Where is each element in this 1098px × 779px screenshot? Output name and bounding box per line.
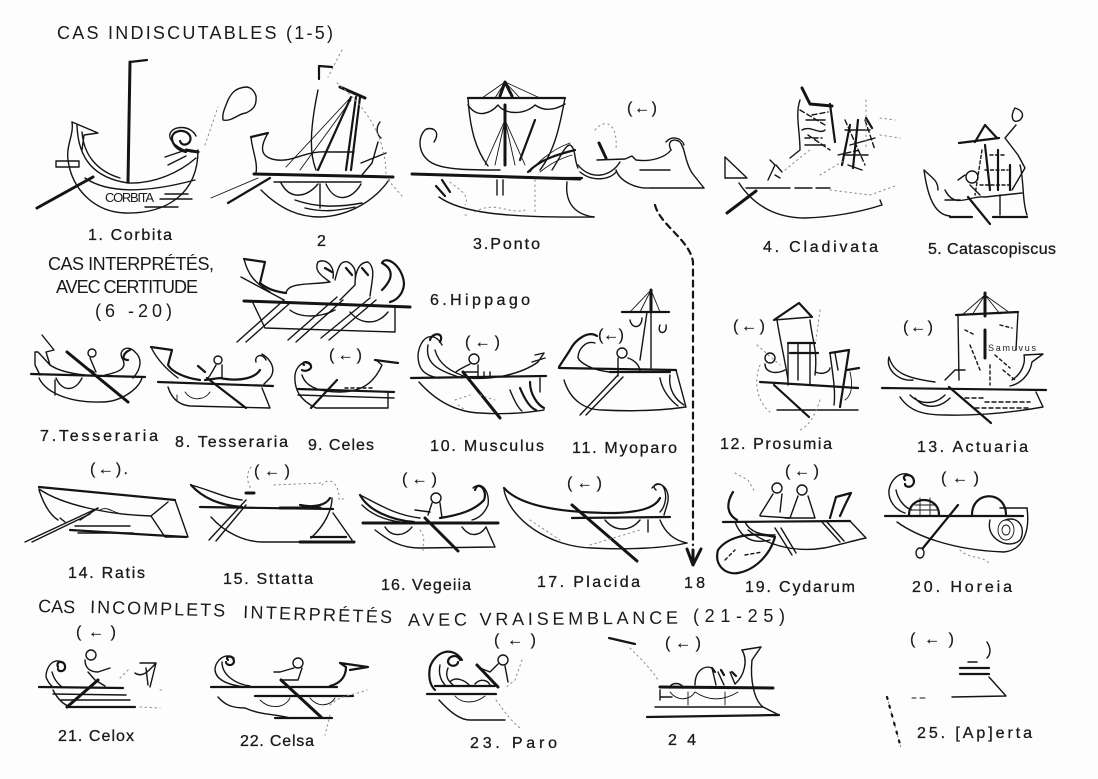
label: 20. Horeia bbox=[912, 579, 1012, 596]
arrow note: (←) bbox=[567, 475, 602, 492]
ship 1: Corbita bbox=[37, 60, 218, 244]
label: 4. Cladivata bbox=[763, 239, 878, 256]
ship 4: Cladivata bbox=[725, 88, 900, 256]
ship 7: Tesseraria bbox=[31, 335, 158, 445]
label: 11. Myoparo bbox=[572, 440, 677, 457]
label: 8. Tesseraria bbox=[175, 434, 288, 451]
arrow note: (←) bbox=[254, 463, 290, 480]
ship 21: Celox bbox=[39, 624, 165, 745]
arrow note: (←) bbox=[329, 347, 362, 364]
label: 10. Musculus bbox=[430, 438, 544, 455]
label: 15. Sttatta bbox=[223, 571, 313, 588]
label: 5. Catascopiscus bbox=[928, 241, 1056, 258]
label: 21. Celox bbox=[58, 728, 134, 745]
heading: cas incomplets: INCOMPLETS bbox=[90, 597, 225, 621]
label: 14. Ratis bbox=[68, 565, 145, 582]
ship 13: Actuaria bbox=[882, 293, 1046, 456]
arrow note: (←) bbox=[402, 471, 437, 488]
arrow note: (←) bbox=[494, 632, 536, 649]
heading: cas incomplets: INTERPRÉTÉS bbox=[243, 602, 392, 627]
heading: cas incomplets: (21-25) bbox=[693, 606, 785, 626]
arrow note: (←) bbox=[76, 624, 116, 641]
arrow note: (←) bbox=[465, 334, 500, 351]
heading: cas incomplets bbox=[38, 596, 785, 630]
heading: cas incomplets: AVEC VRAISEMBLANCE bbox=[408, 608, 678, 630]
ship 18 fragment with bow bbox=[552, 100, 704, 188]
ship 16: Vegeiia bbox=[360, 471, 498, 594]
label: 1. Corbita bbox=[88, 227, 172, 244]
ship 2 bbox=[211, 50, 402, 250]
fragment: cloud outline bbox=[223, 87, 256, 120]
arrow note: (←) bbox=[941, 470, 979, 487]
label: 2 bbox=[317, 233, 326, 250]
ship 10: Musculus bbox=[411, 334, 546, 455]
ship 23: Paro bbox=[427, 632, 557, 752]
arrow note: (←) bbox=[903, 319, 933, 336]
label: 22. Celsa bbox=[240, 733, 314, 750]
label: 9. Celes bbox=[308, 437, 374, 454]
label: 13. Actuaria bbox=[917, 439, 1028, 456]
label: 7.Tesseraria bbox=[40, 428, 158, 445]
arrow note: (←) bbox=[665, 635, 701, 652]
heading: cas interprétés: (6 -20) bbox=[95, 301, 172, 321]
ship 15: Statta bbox=[191, 463, 354, 588]
heading: cas incomplets: CAS bbox=[38, 596, 76, 617]
arrow note: (←) bbox=[785, 463, 819, 480]
ship 24 bbox=[609, 635, 779, 749]
arrow note: (←) bbox=[733, 318, 765, 335]
label: 24 bbox=[668, 732, 696, 749]
sail inscription: Samuvus bbox=[988, 343, 1036, 353]
label: 3.Ponto bbox=[473, 236, 540, 253]
ship 12: Prosumia bbox=[720, 303, 859, 453]
heading: cas interprétés bbox=[48, 254, 214, 321]
ship 3: Ponto bbox=[412, 82, 594, 253]
ship 20: Horeia bbox=[885, 470, 1028, 596]
ship 14: Ratis bbox=[25, 461, 188, 582]
dashed arrow to 18 bbox=[655, 205, 701, 565]
ship 11: Myoparo bbox=[559, 290, 686, 457]
label: 19. Cydarum bbox=[745, 579, 855, 596]
arrow note: (←). bbox=[90, 461, 128, 478]
ship 8: Tesseraria bbox=[151, 347, 288, 451]
ship 25: Aperta bbox=[887, 631, 1032, 748]
label: 12. Prosumia bbox=[720, 436, 832, 453]
ship 19: Cydarum bbox=[717, 463, 866, 596]
label: 16. Vegeiia bbox=[381, 577, 471, 594]
label: 17. Placida bbox=[537, 574, 640, 591]
heading: cas indiscutables: CAS INDISCUTABLES (1-5) bbox=[57, 23, 333, 43]
ship 9: Celes bbox=[295, 347, 398, 454]
heading: cas interprétés: AVEC CERTITUDE bbox=[56, 277, 198, 297]
ship 6: Hippago bbox=[237, 259, 530, 342]
ship 17: Placida bbox=[504, 475, 687, 591]
label: 6.Hippago bbox=[430, 292, 530, 309]
ship 22: Celsa bbox=[211, 656, 368, 750]
hull inscription: CORBITA bbox=[105, 190, 154, 205]
heading: cas interprétés: CAS INTERPRÉTÉS, bbox=[48, 254, 214, 274]
label: 18: 18 bbox=[684, 575, 705, 592]
arrow note: (←) bbox=[627, 100, 657, 117]
arrow note: (←) bbox=[598, 327, 624, 344]
label: 25. [Ap]erta bbox=[917, 725, 1032, 742]
ship 5: Catascopiscus bbox=[924, 108, 1056, 258]
label: 23. Paro bbox=[470, 735, 557, 752]
arrow note: (←) bbox=[910, 631, 954, 648]
